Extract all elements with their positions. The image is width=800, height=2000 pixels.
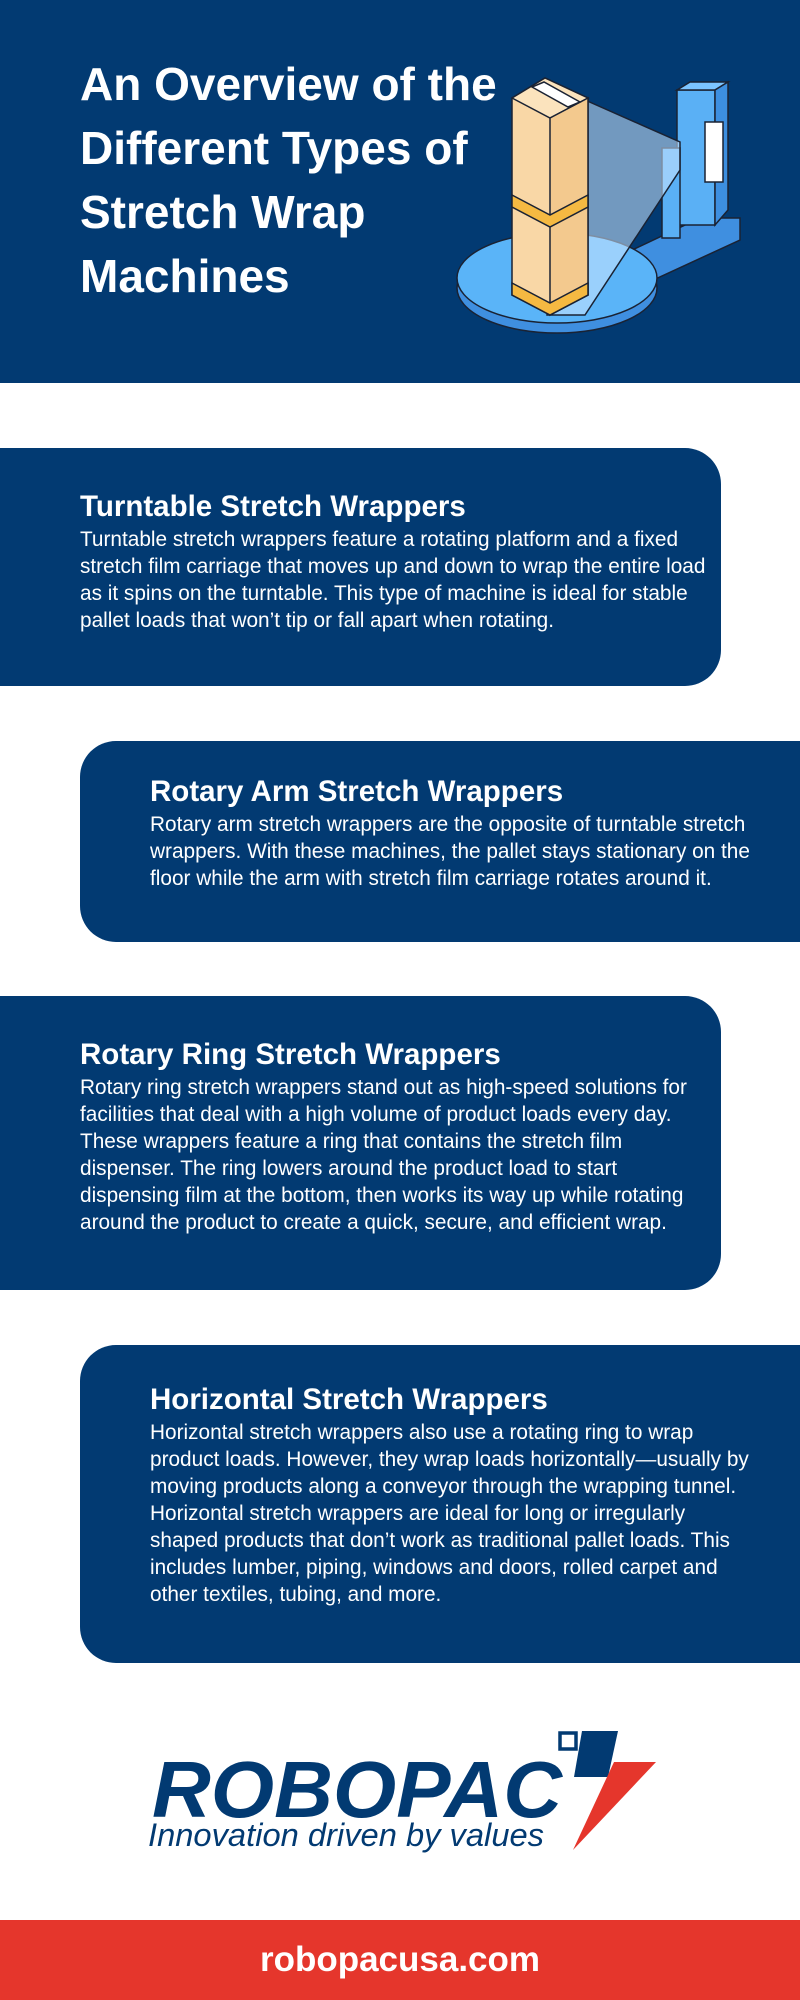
heading: turntable: Turntable Stretch Wrappers — [80, 490, 466, 523]
heading: horizontal: Horizontal Stretch Wrappers — [150, 1383, 548, 1416]
logo — [148, 1731, 656, 1853]
logo: ROBOPAC — [152, 1745, 563, 1834]
text: turntable — [80, 528, 705, 632]
heading: rotary ring: Rotary Ring Stretch Wrappers — [80, 1038, 501, 1071]
text: rotary arm: Rotary arm stretch wrappers are the opposite of turntable stretch wrappers. With these machines, the pallet stays stationary on the floor while the arm with stretch film carriage rotates around it. — [150, 813, 750, 890]
title: An Overview of the Different Types of Stretch Wrap Machines — [80, 58, 497, 302]
text: turntable: as it spins on the turntable. This type of machine is ideal for stable — [80, 582, 688, 605]
panel: horizontal — [80, 1345, 800, 1663]
text: turntable: Turntable stretch wrappers feature a rotating platform and a fixed — [80, 528, 678, 551]
footer: website — [0, 1920, 800, 2000]
panel: rotary ring — [0, 996, 721, 1290]
panel: turntable — [0, 448, 721, 686]
illustration: turntable stretch wrapper — [456, 77, 741, 334]
logo: Innovation driven by values — [148, 1817, 544, 1853]
panel: rotary arm — [80, 741, 800, 942]
text: rotary ring: Rotary ring stretch wrappers stand out as high-speed solutions for facilities that deal with a high volume of product loads every day. These wrappers feature a ring that contains the stretch film dispenser. The ring lowers around the product load to start dispensing film at the bottom, then works its way up while rotating around the product to create a quick, secure, and efficient wrap. — [80, 1076, 687, 1234]
text: turntable: stretch film carriage that moves up and down to wrap the entire load — [80, 555, 705, 578]
footer: website: robopacusa.com — [260, 1940, 540, 1979]
text: turntable: pallet loads that won’t tip or fall apart when rotating. — [80, 609, 554, 632]
heading: rotary arm: Rotary Arm Stretch Wrappers — [150, 775, 563, 808]
header — [0, 0, 800, 383]
text: horizontal: Horizontal stretch wrappers also use a rotating ring to wrap product loads. However, they wrap loads horizontally—usually by moving products along a conveyor through the wrapping tunnel. Horizontal stretch wrappers are ideal for long or irregularly shaped products that don’t work as traditional pallet loads. This includes lumber, piping, windows and doors, rolled carpet and other textiles, tubing, and more. — [150, 1421, 749, 1606]
